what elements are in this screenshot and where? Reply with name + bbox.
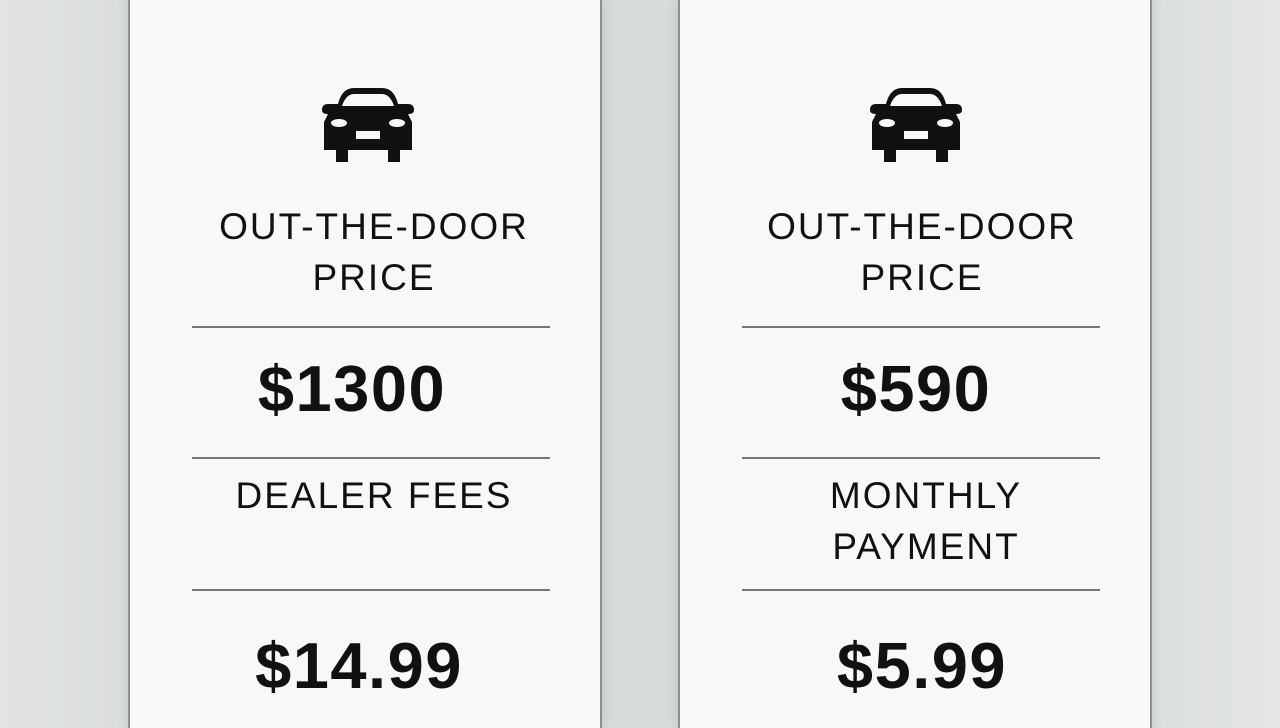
panel: right card — [678, 0, 1152, 728]
label: monthly payment — [830, 475, 1022, 567]
icon: car — [322, 88, 414, 162]
label: monthly payment: MONTHLY — [830, 475, 1022, 516]
heading: out-the-door price: OUT-THE-DOOR — [767, 206, 1077, 247]
panel: left card — [128, 0, 602, 728]
price: $590: $590 — [841, 352, 991, 425]
heading: out-the-door price: PRICE — [860, 257, 984, 298]
heading: out-the-door price: OUT-THE-DOOR — [219, 206, 529, 247]
label: monthly payment: PAYMENT — [832, 526, 1020, 567]
label: dealer fees: DEALER FEES — [236, 475, 512, 516]
heading: out-the-door price: PRICE — [312, 257, 436, 298]
heading: out-the-door price — [767, 206, 1077, 298]
heading: out-the-door price — [219, 206, 529, 298]
icon: car — [870, 88, 962, 162]
price: $14.99: $14.99 — [255, 629, 463, 702]
price: $1300: $1300 — [258, 352, 446, 425]
price: $5.99: $5.99 — [837, 629, 1007, 702]
